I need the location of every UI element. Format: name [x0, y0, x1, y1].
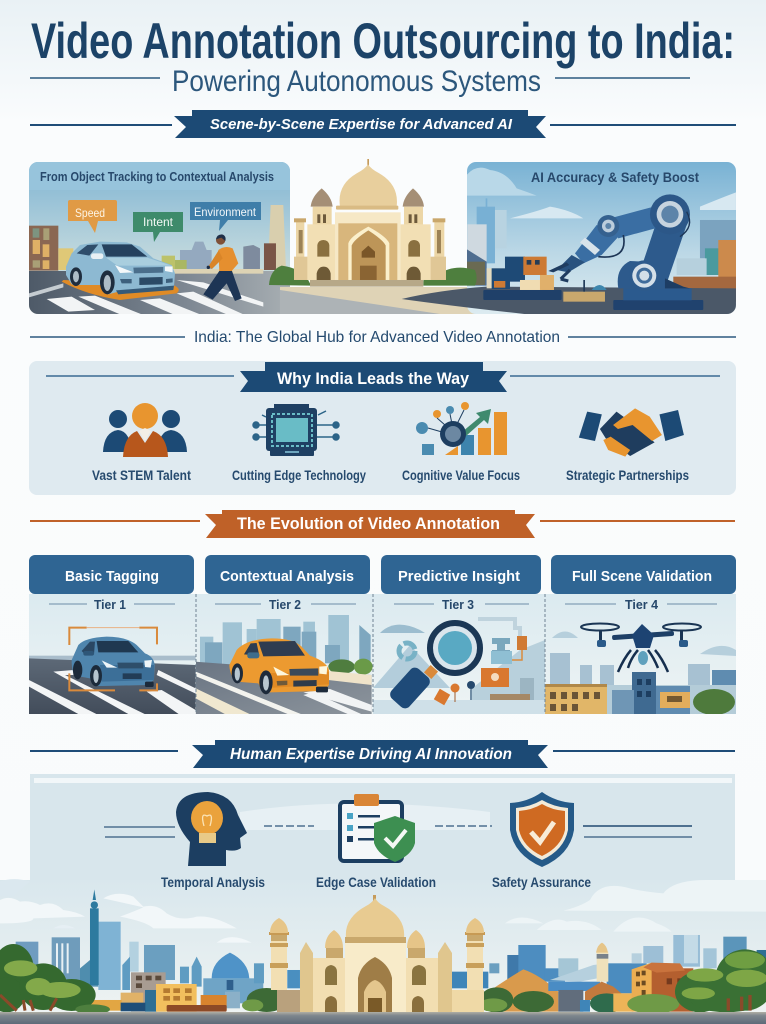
ribbon heading: evolution: The Evolution of Video Annotation — [237, 514, 500, 533]
skyline left — [0, 889, 300, 1014]
tier 3: predictive insight: Tier 3 — [442, 597, 474, 612]
icon: head with light bulb — [176, 792, 247, 866]
machine block — [483, 257, 607, 302]
panel headers text — [40, 169, 699, 185]
small domes — [311, 188, 333, 207]
windows — [317, 240, 420, 257]
tier 3: predictive insight: Predictive Insight — [398, 568, 520, 585]
data blocks — [492, 638, 510, 644]
panel: why india leads the way — [29, 361, 736, 495]
ribbon heading: Why India Leads the Way — [277, 369, 470, 388]
magnifier — [390, 668, 430, 708]
icon: safety shield — [510, 792, 574, 867]
ribbon heading: scene-by-scene expertise: Scene-by-Scene Expertise for Advanced AI — [210, 116, 513, 133]
tier 4: full scene validation: Tier 4 — [625, 597, 659, 612]
panel: right robot scene — [445, 162, 737, 314]
text: labels: Cognitive Value Focus — [402, 467, 520, 483]
main body — [307, 224, 431, 280]
icon: clipboard with shield — [340, 794, 415, 862]
callout: speed — [68, 200, 117, 233]
text: labels — [92, 467, 689, 483]
road band — [280, 287, 475, 314]
tier 4: full scene validation — [545, 555, 736, 715]
panel: object tracking — [29, 162, 290, 314]
icon: handshake — [579, 408, 684, 457]
callout: speed: Speed — [75, 206, 105, 220]
tier 1: basic tagging: Tier 1 — [94, 597, 126, 612]
panel: human expertise with skyline — [0, 774, 766, 1024]
callout: environment — [190, 202, 261, 231]
monument — [269, 895, 485, 1012]
text: labels: Temporal Analysis — [161, 874, 265, 890]
tier 1: basic tagging — [29, 555, 196, 715]
text: labels — [161, 874, 591, 890]
icon: cognitive growth chart — [416, 402, 507, 455]
panel headers text: AI Accuracy & Safety Boost — [531, 169, 699, 185]
side minarets — [296, 222, 304, 258]
car: blue tagged — [72, 637, 155, 687]
dome — [367, 159, 369, 169]
bounding box corners — [69, 628, 157, 690]
callout: intent: Intent — [143, 215, 174, 229]
trees — [0, 944, 96, 1012]
trees — [456, 987, 554, 1013]
tier 2: contextual analysis — [196, 555, 373, 715]
tier 3: predictive insight — [373, 555, 545, 714]
ribbon heading: scene-by-scene expertise — [30, 110, 736, 138]
text: labels: Strategic Partnerships — [566, 467, 689, 483]
tier 4: full scene validation: Full Scene Validation — [572, 568, 712, 585]
skyline right — [452, 935, 766, 1014]
text: labels: Safety Assurance — [492, 874, 591, 890]
callout: environment: Environment — [194, 205, 257, 219]
tier panels — [29, 555, 736, 715]
car: orange — [229, 638, 329, 694]
shrubs — [269, 266, 310, 286]
icon: chip — [253, 404, 339, 456]
panel headers text: From Object Tracking to Contextual Analysis — [40, 170, 274, 184]
tier 2: contextual analysis: Contextual Analysis — [220, 568, 354, 585]
drone — [581, 624, 701, 672]
clouds and skyline — [467, 168, 537, 196]
road — [29, 271, 290, 314]
subtitle with side rules: Powering Autonomous Systems — [172, 65, 541, 98]
background buildings — [29, 205, 286, 271]
central monument — [269, 159, 477, 287]
connector lines — [104, 826, 692, 837]
car with tracking pad — [62, 242, 179, 300]
ribbon heading: human expertise — [30, 740, 735, 768]
ground wedge and machinery — [402, 194, 736, 315]
text: labels: Cutting Edge Technology — [232, 467, 366, 483]
tier 2: contextual analysis: Tier 2 — [269, 597, 301, 612]
text: labels: Edge Case Validation — [316, 874, 436, 890]
ribbon heading — [46, 362, 720, 392]
callout: intent — [133, 212, 183, 242]
section line: india global hub: India: The Global Hub for Advanced Video Annotation — [194, 329, 560, 346]
tier 1: basic tagging: Basic Tagging — [65, 568, 159, 585]
ground — [0, 1012, 766, 1024]
text: labels: Vast STEM Talent — [92, 467, 191, 483]
ribbon heading: human expertise: Human Expertise Driving AI Innovation — [230, 746, 512, 763]
panel header — [29, 162, 290, 184]
portal arch — [348, 227, 389, 280]
person walking — [203, 234, 242, 301]
icon: people — [103, 403, 187, 457]
hero banner illustration — [29, 159, 737, 315]
crosswalk and car scene — [29, 269, 263, 314]
robot arm — [548, 194, 703, 310]
clouds — [0, 879, 766, 943]
ribbon heading: evolution — [30, 510, 735, 538]
